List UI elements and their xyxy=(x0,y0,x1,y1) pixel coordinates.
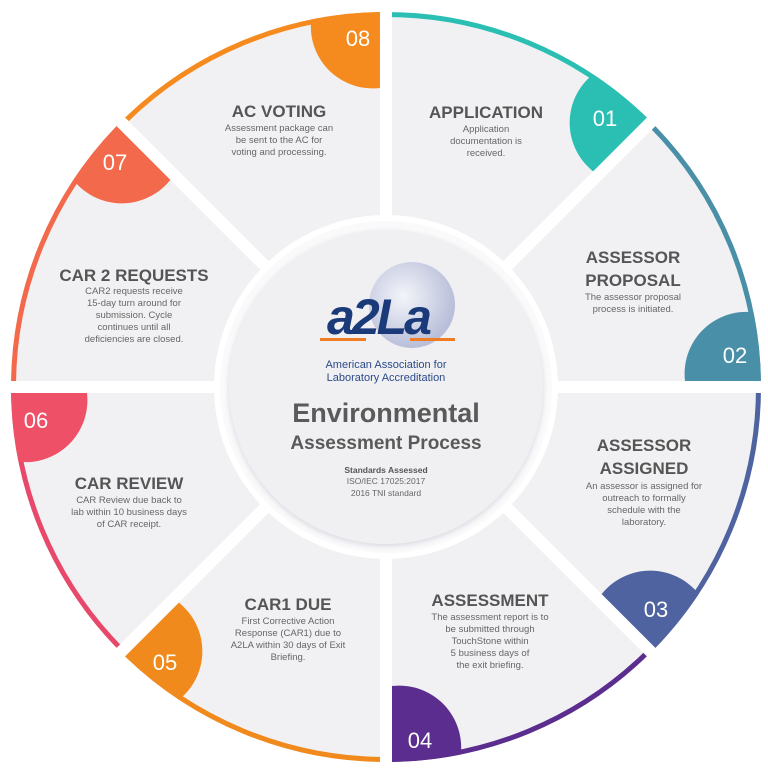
text: car1 due: Briefing. xyxy=(271,652,305,663)
text: assessment xyxy=(431,591,549,671)
numbers: 05 xyxy=(153,650,177,675)
logo: A2LA: American Association for xyxy=(325,359,447,371)
numbers: 07 xyxy=(103,150,127,175)
text: car review: CAR REVIEW xyxy=(75,474,184,493)
segment 01: application xyxy=(386,12,651,265)
text: assessor assigned: outreach to formally xyxy=(602,493,686,504)
standards assessed xyxy=(344,465,428,498)
text: assessment: the exit briefing. xyxy=(456,660,524,671)
text: car review xyxy=(71,474,187,530)
center title xyxy=(290,398,482,454)
text: application: documentation is xyxy=(450,136,522,147)
numbers: 03 xyxy=(644,597,668,622)
segment 04: assessment xyxy=(386,509,651,762)
logo: A2LA: a2La xyxy=(327,289,431,345)
segment 02: assessor proposal xyxy=(508,122,761,387)
text: assessment: TouchStone within xyxy=(451,636,529,647)
text: car 2 requests: 15-day turn around for xyxy=(87,298,181,309)
text: assessment: be submitted through xyxy=(445,624,535,635)
segment 05: car1 due xyxy=(121,509,386,762)
text: ac voting: be sent to the AC for xyxy=(236,135,322,146)
text: assessor assigned: ASSIGNED xyxy=(600,459,688,478)
text: car 2 requests xyxy=(59,266,209,345)
segment 07: car 2 requests xyxy=(11,122,264,387)
text: car 2 requests: submission. Cycle xyxy=(96,310,172,321)
text: assessor assigned: An assessor is assigned for xyxy=(586,481,702,492)
standards assessed: 2016 TNI standard xyxy=(351,488,421,498)
numbers: 06 xyxy=(24,408,48,433)
segment 06: car review xyxy=(11,387,264,652)
numbers: 04 xyxy=(408,728,432,753)
text: application: received. xyxy=(467,148,505,159)
segment 08: ac voting xyxy=(121,12,386,265)
text: car1 due: Response (CAR1) due to xyxy=(235,628,341,639)
numbers: 08 xyxy=(346,26,370,51)
text: car 2 requests: CAR2 requests receive xyxy=(85,286,183,297)
numbers: 02 xyxy=(723,343,747,368)
text: assessor proposal xyxy=(585,248,681,315)
text: assessment: The assessment report is to xyxy=(431,612,549,623)
text: application xyxy=(429,103,543,159)
text: assessor assigned: laboratory. xyxy=(622,517,666,528)
text: car1 due: A2LA within 30 days of Exit xyxy=(231,640,346,651)
text: car 2 requests: deficiencies are closed. xyxy=(85,334,183,345)
text: car 2 requests: continues until all xyxy=(98,322,170,333)
text: assessor assigned xyxy=(586,436,702,528)
text: assessor proposal: PROPOSAL xyxy=(585,271,681,290)
logo: A2LA xyxy=(320,262,455,384)
standards assessed: ISO/IEC 17025:2017 xyxy=(347,476,425,486)
text: ac voting: Assessment package can xyxy=(225,123,333,134)
center circle xyxy=(220,221,552,553)
text: assessor proposal: The assessor proposal xyxy=(585,292,681,303)
text: assessor assigned: ASSESSOR xyxy=(597,436,691,455)
text: ac voting: voting and processing. xyxy=(231,147,327,158)
text: assessment: ASSESSMENT xyxy=(431,591,549,610)
center title: Assessment Process xyxy=(290,433,482,454)
text: car1 due xyxy=(231,595,346,663)
text: assessor proposal: ASSESSOR xyxy=(586,248,680,267)
text: application: APPLICATION xyxy=(429,103,543,122)
text: car 2 requests: CAR 2 REQUESTS xyxy=(59,266,209,285)
text: assessor proposal: process is initiated. xyxy=(593,304,673,315)
logo: A2LA: Laboratory Accreditation xyxy=(327,372,445,384)
text: car review: lab within 10 business days xyxy=(71,507,187,518)
segment 03: assessor assigned xyxy=(508,387,761,652)
text: ac voting: AC VOTING xyxy=(232,102,326,121)
center title: Environmental xyxy=(292,398,480,428)
text: ac voting xyxy=(225,102,333,158)
text: car1 due: CAR1 DUE xyxy=(245,595,331,614)
text: car1 due: First Corrective Action xyxy=(242,616,334,627)
text: car review: CAR Review due back to xyxy=(76,495,182,506)
text: assessor assigned: schedule with the xyxy=(607,505,681,516)
standards assessed: Standards Assessed xyxy=(344,465,428,475)
text: car review: of CAR receipt. xyxy=(97,519,161,530)
numbers: 01 xyxy=(593,106,617,131)
text: assessment: 5 business days of xyxy=(451,648,530,659)
text: application: Application xyxy=(463,124,509,135)
